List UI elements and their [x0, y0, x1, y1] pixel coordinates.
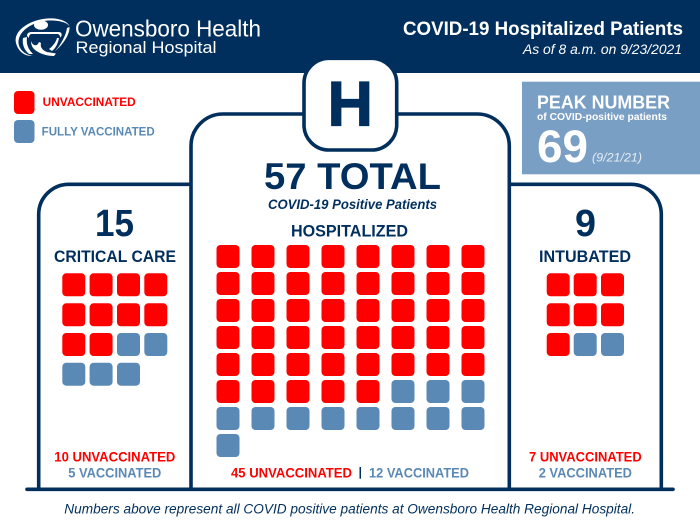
- intubated count: 9: [575, 203, 596, 245]
- intubated breakdown: 2 VACCINATED: [539, 464, 632, 480]
- footnote: Numbers above represent all COVID positive patients at Owensboro Health Regional Hospital.: [64, 501, 635, 516]
- panel: peak number: PEAK NUMBER: [537, 91, 670, 112]
- hospital name: Owensboro Health: [75, 16, 261, 42]
- legend: FULLY VACCINATED: [42, 126, 155, 138]
- panel: intubated: [509, 184, 661, 489]
- panel: peak number: [522, 82, 700, 174]
- legend: UNVACCINATED: [43, 97, 136, 109]
- hospital name: Regional Hospital: [76, 38, 216, 57]
- hospitalized patient squares: [216, 245, 484, 457]
- header banner: [0, 0, 700, 73]
- panel: peak number: 69: [537, 121, 588, 172]
- icon: hospital H badge: [304, 58, 397, 150]
- critical care breakdown: [54, 449, 175, 480]
- report title: COVID-19 Hospitalized Patients: [403, 19, 683, 40]
- hospitalized breakdown: 45 UNVACCINATED: [231, 464, 352, 480]
- hospitalized breakdown: 12 VACCINATED: [369, 464, 469, 480]
- total subtitle: COVID-19 Positive Patients: [268, 197, 437, 212]
- hospitalized breakdown: [231, 464, 469, 480]
- report date: As of 8 a.m. on 9/23/2021: [522, 41, 682, 57]
- critical care breakdown: 5 VACCINATED: [68, 464, 161, 480]
- icon: hospital logo: [16, 18, 70, 56]
- critical care count: 15: [95, 203, 134, 245]
- intubated patient squares: [547, 273, 624, 356]
- intubated heading: INTUBATED: [539, 248, 631, 266]
- critical care heading: CRITICAL CARE: [54, 248, 176, 266]
- panel: critical care: [39, 184, 191, 489]
- total count: 57 TOTAL: [264, 156, 441, 197]
- legend: [14, 91, 155, 143]
- hospitalized heading: HOSPITALIZED: [291, 223, 408, 241]
- critical care patient squares: [62, 273, 167, 386]
- hospital name: [75, 16, 261, 57]
- panel: peak number: of COVID-positive patients: [537, 112, 667, 123]
- intubated breakdown: 7 UNVACCINATED: [529, 449, 642, 465]
- intubated breakdown: [529, 449, 642, 480]
- icon: hospital H badge: H: [328, 70, 373, 140]
- panel: peak number: (9/21/21): [592, 153, 642, 165]
- critical care breakdown: 10 UNVACCINATED: [54, 449, 175, 465]
- panel: hospitalized: [191, 58, 509, 489]
